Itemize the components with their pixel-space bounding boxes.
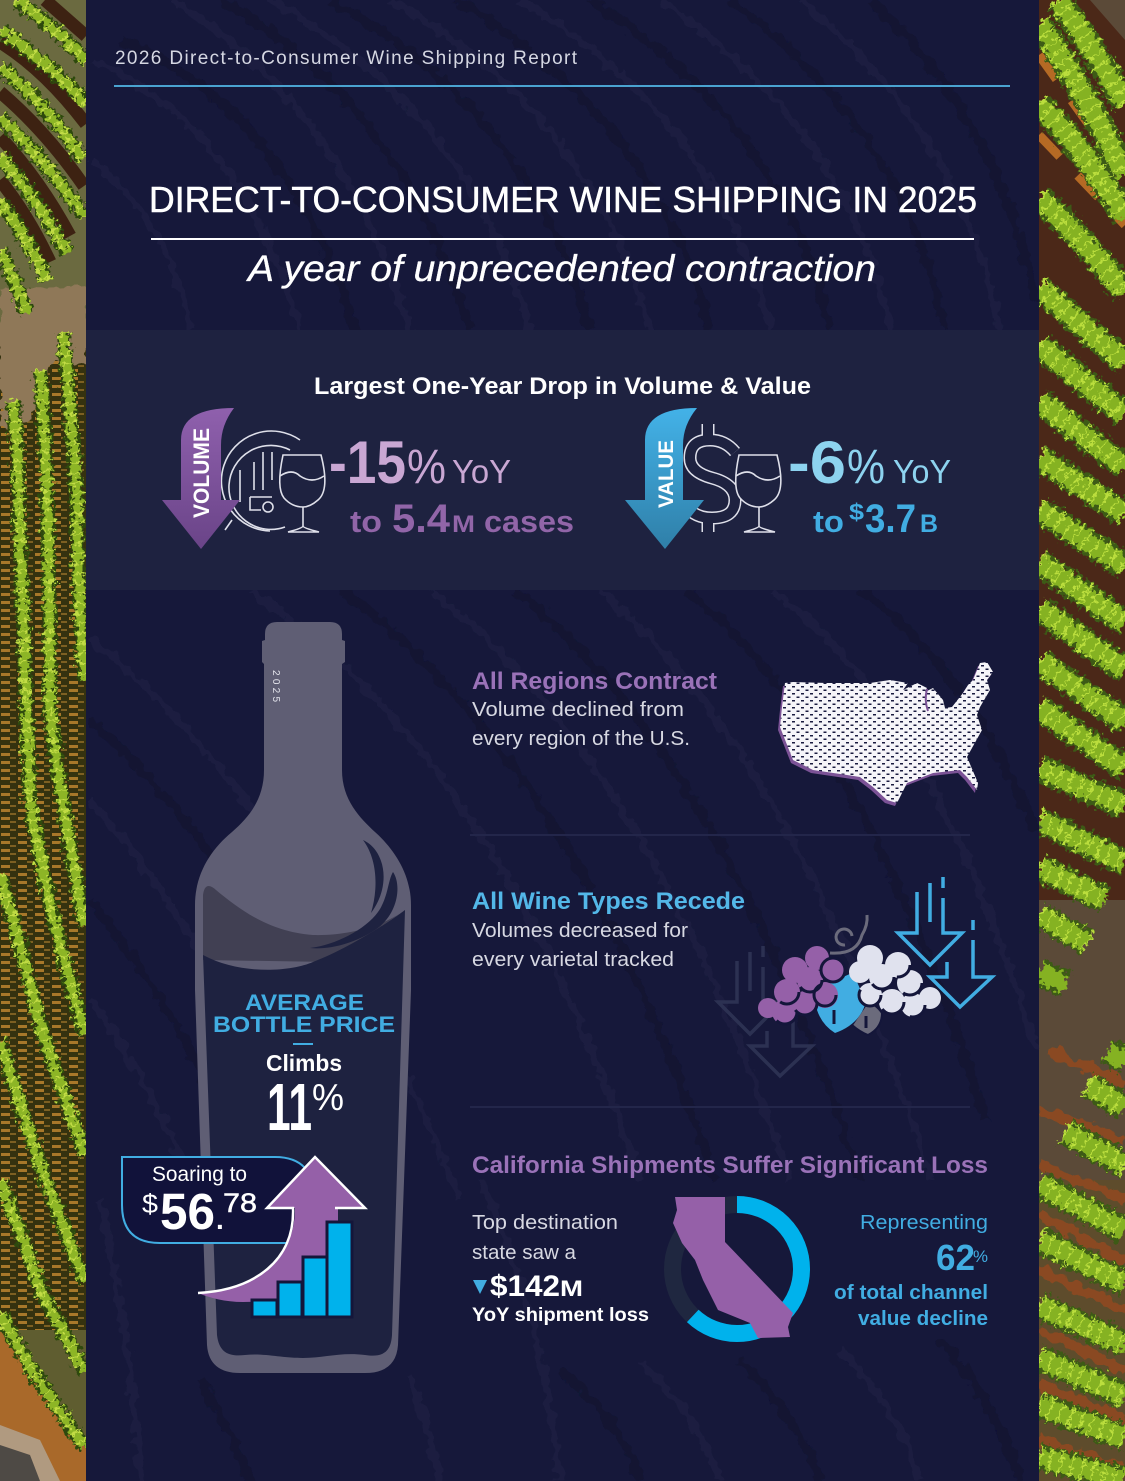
wine body [203,910,405,1358]
california share stat: 62 [936,1237,975,1278]
california loss stat: $142 [490,1270,560,1303]
average bottle price label [213,990,395,1045]
section: all wine types recede [472,888,745,971]
icon: value down arrow [625,408,704,549]
section dividers [470,834,970,1108]
wine surface shadow [203,886,405,962]
arrow label value: VALUE [655,440,678,508]
section: all regions contract [472,668,717,750]
icon: faded down arrows [718,946,812,1076]
climbs stat: % [312,1077,344,1118]
stat: volume total: to [350,504,382,539]
wine bottle [122,622,411,1373]
stat: volume total [350,497,574,541]
icon: grapes [758,915,941,1035]
section: all wine types recede: All Wine Types Recede [472,888,745,915]
stat: value total: to [813,504,844,539]
stat: value change: % [847,441,885,494]
section: all wine types recede: every varietal tracked [472,949,674,971]
stat: value total: 3.7 [865,497,916,541]
arrow label volume: VOLUME [189,428,214,518]
icon: blue down arrows [898,877,992,1007]
stat: value total [813,497,938,541]
california share stat: value decline [858,1308,988,1330]
stat: volume total: cases [484,504,574,539]
stat: volume total: 5.4 [392,497,451,541]
stat: volume change: % [407,441,446,494]
panel heading: Largest One-Year Drop in Volume & Value [314,373,811,400]
california share stat: of total channel [834,1282,988,1304]
california loss stat: state saw a [472,1242,577,1264]
average bottle price label: BOTTLE PRICE [213,1012,395,1037]
california loss stat: YoY shipment loss [472,1305,649,1326]
stat: volume change [329,429,511,496]
section: all regions contract: every region of the U.S. [472,728,690,750]
callout: soaring price: 56 [160,1183,215,1240]
california share stat: Representing [860,1212,988,1234]
california loss stat [472,1212,649,1326]
callout: soaring price: $ [142,1189,158,1219]
section: all regions contract: Volume declined from [472,699,684,721]
stat: value total: B [920,510,938,538]
stat: value change [788,429,951,496]
callout: soaring price: 78 [223,1188,257,1218]
stat: value change: -6 [788,429,846,496]
section: all wine types recede: Volumes decreased for [472,920,688,942]
callout: soaring price [122,1157,305,1243]
stat: volume total: M [452,511,475,538]
report header: 2026 Direct-to-Consumer Wine Shipping Report [115,48,578,69]
icon: wine barrel and glass [221,431,325,532]
california loss stat: M [560,1276,583,1301]
section: california heading: California Shipments Suffer Significant Loss [472,1152,988,1179]
average bottle price label: AVERAGE [245,990,364,1015]
callout: soaring price: Soaring to [152,1163,247,1186]
icon: volume down arrow [162,408,240,549]
photo strip: right vineyard [1039,0,1125,1481]
stat: value change: YoY [893,453,951,490]
california share stat [834,1212,988,1330]
panel: largest one-year drop [86,330,1039,590]
callout: soaring price: . [216,1204,224,1235]
icon: us map [778,662,993,806]
rising arrow [198,1157,365,1302]
icon: dollar sign and glass [686,424,781,532]
donut chart with california map [672,1197,802,1338]
title: DIRECT-TO-CONSUMER WINE SHIPPING IN 2025 [149,179,977,220]
california share stat: % [973,1247,988,1266]
section: all regions contract: All Regions Contract [472,668,717,695]
stat: volume change: -15 [329,429,406,496]
bottle silhouette [195,622,411,1373]
stat: value total: $ [849,499,864,525]
bar chart: rising prices [252,1222,352,1317]
climbs stat: Climbs [266,1050,342,1076]
california loss stat: Top destination [472,1212,618,1234]
photo strip: left vineyard [0,0,86,1481]
climbs stat: 11 [267,1070,312,1145]
bottle glass highlights [310,840,397,948]
stat: volume change: YoY [452,453,511,490]
subtitle: A year of unprecedented contraction [246,248,876,289]
bottle year label: 2025 [270,670,281,702]
